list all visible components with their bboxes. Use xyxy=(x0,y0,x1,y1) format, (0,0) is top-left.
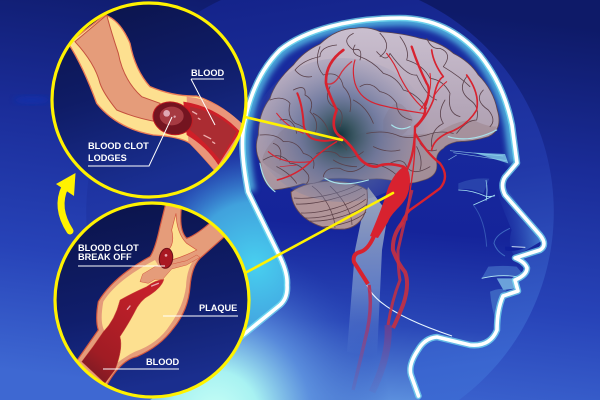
label: blood clot break off xyxy=(78,243,165,266)
upper arterial branches xyxy=(268,47,477,227)
blood xyxy=(183,102,240,165)
forehead streaks xyxy=(448,151,507,161)
label: blood xyxy=(191,68,225,125)
label: blood clot lodges xyxy=(88,117,172,166)
label: blood clot break off: BREAK OFF xyxy=(78,252,132,262)
label: blood clot break off: BLOOD CLOT xyxy=(78,243,139,253)
cerebellum xyxy=(291,181,367,229)
brain lower rim highlights xyxy=(260,125,497,192)
neck vertebral column xyxy=(347,187,388,357)
brain body xyxy=(256,28,499,190)
lips xyxy=(482,266,522,278)
connector line to carotid plaque xyxy=(247,193,393,272)
brain folds xyxy=(260,33,493,183)
label: blood: BLOOD xyxy=(191,68,225,78)
panel: blood clot break off lens xyxy=(55,200,249,397)
label: blood clot lodges: BLOOD CLOT xyxy=(88,141,149,151)
eye and brow xyxy=(458,180,495,205)
head and neck silhouette xyxy=(150,18,544,400)
label: blood xyxy=(103,357,180,369)
head outline xyxy=(200,18,544,396)
salmon channel xyxy=(140,255,200,283)
vessel wall xyxy=(68,15,247,177)
vessel wall xyxy=(75,200,230,388)
brain xyxy=(254,28,499,202)
label: blood: BLOOD xyxy=(146,357,180,367)
label: plaque: PLAQUE xyxy=(199,303,237,313)
salmon lumen xyxy=(75,15,160,122)
ischemic dark area xyxy=(254,58,430,202)
face details xyxy=(448,151,543,323)
brown lower shading xyxy=(262,120,497,184)
face highlight along nose xyxy=(497,183,543,257)
blood channel xyxy=(82,279,164,383)
clot xyxy=(152,101,193,136)
plaque xyxy=(102,257,197,363)
arteries xyxy=(268,47,477,227)
arrow between lenses xyxy=(56,173,76,231)
label: blood clot lodges: LODGES xyxy=(88,153,127,163)
label: plaque xyxy=(163,303,238,316)
nostril xyxy=(505,247,525,251)
breaking clot xyxy=(158,248,174,269)
carotid artery bulge and neck vessels xyxy=(353,166,412,392)
nose wing xyxy=(494,228,510,256)
blood flecks xyxy=(193,112,215,143)
jaw line xyxy=(367,285,452,336)
connector line to lodged clot xyxy=(245,117,342,140)
outer pink wall near blood xyxy=(186,96,242,170)
panel: blood clot lodges lens xyxy=(52,3,247,197)
channel flecks xyxy=(127,283,158,309)
